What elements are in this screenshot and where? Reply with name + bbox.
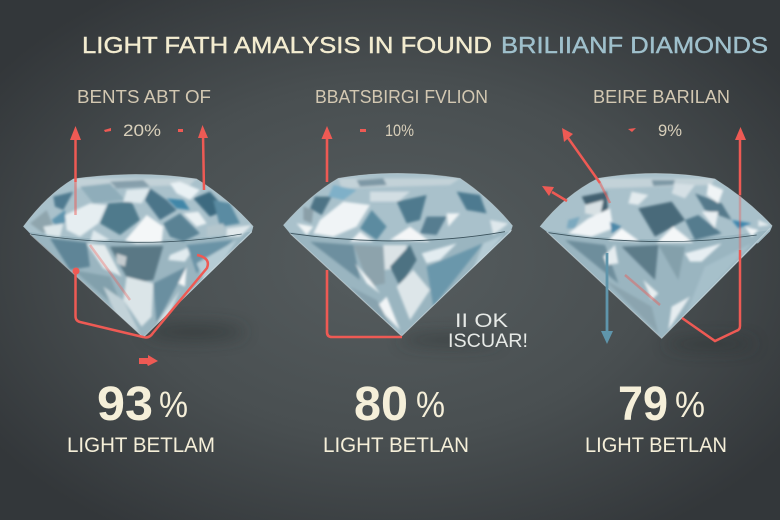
pavilion bbox=[310, 242, 360, 280]
stat: right: LIGHT BETLAN bbox=[585, 434, 727, 457]
faint internal ray: left bbox=[90, 245, 130, 300]
stat: middle: LIGHT BETLAN bbox=[323, 434, 469, 457]
stat: right bbox=[585, 378, 727, 457]
column heading: middle: BBATSBIRGI FVLION bbox=[315, 87, 488, 107]
stat: left: 93 bbox=[97, 378, 153, 431]
small percent: right: 9% bbox=[658, 121, 682, 140]
callout text: II OK bbox=[455, 311, 508, 332]
girdle line bbox=[30, 234, 242, 242]
diamond: right bbox=[535, 167, 775, 338]
light path arrows: left bbox=[70, 125, 208, 366]
light path arrows: right bbox=[542, 127, 746, 341]
title: LIGHT FATH AMALYSIS IN FOUND bbox=[82, 32, 492, 58]
title: BRILIIANF DIAMONDS bbox=[501, 32, 768, 58]
blue exit arrow: right bbox=[601, 253, 613, 344]
stat: middle: % bbox=[416, 384, 445, 425]
stat: left: LIGHT BETLAM bbox=[67, 434, 215, 457]
faint internal ray: right bbox=[625, 275, 660, 305]
callout text: ISCUAR! bbox=[448, 331, 528, 352]
small percent: left: 20% bbox=[123, 121, 161, 140]
diamond: left bbox=[20, 167, 257, 338]
column heading: left: BENTS ABT OF bbox=[77, 87, 211, 107]
callout text bbox=[448, 311, 528, 352]
diamond shadows bbox=[145, 324, 755, 350]
stat: right: 79 bbox=[618, 378, 668, 431]
pavilion bbox=[565, 240, 618, 283]
pavilion bbox=[50, 238, 90, 270]
small percent: middle: 10% bbox=[385, 121, 414, 140]
stat: left bbox=[67, 378, 215, 457]
stat: middle: 80 bbox=[354, 378, 408, 431]
girdle line bbox=[548, 233, 757, 242]
girdle line bbox=[290, 232, 505, 241]
light path arrows: middle bbox=[322, 126, 402, 337]
diamond: middle bbox=[280, 167, 517, 337]
column heading: right: BEIRE BARILAN bbox=[593, 87, 730, 107]
stat: right: % bbox=[675, 384, 705, 425]
stat: left: % bbox=[159, 384, 188, 425]
stat: middle bbox=[323, 378, 469, 457]
title bbox=[82, 32, 768, 58]
